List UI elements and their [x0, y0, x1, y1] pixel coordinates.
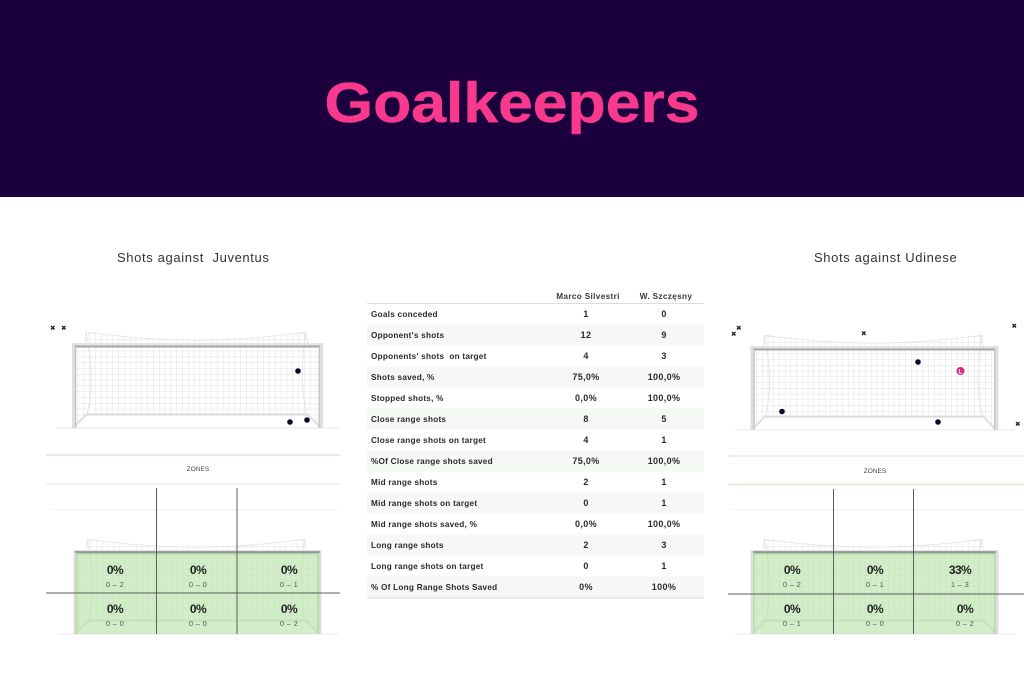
zone values right: 0 – 2 — [783, 580, 801, 589]
row: close range shots: Close range shots — [371, 415, 446, 424]
row: long range saved: 100% — [652, 582, 676, 592]
row: close range saved: 100,0% — [648, 456, 680, 466]
row stripes — [367, 324, 704, 598]
row: long range shots — [371, 540, 667, 550]
row: on target: 3 — [661, 351, 667, 361]
row: mid range saved: 0,0% — [575, 519, 597, 529]
zone values left: 0% — [107, 602, 124, 616]
zone values left: 0 – 0 — [189, 619, 207, 628]
row: goals conceded: 0 — [661, 309, 667, 319]
row: long range on target: Long range shots on target — [371, 562, 484, 571]
panel: Juventus goal shot map — [51, 326, 340, 428]
goal conceded marker — [956, 367, 964, 376]
row: opponent's shots — [371, 330, 667, 340]
zone values left: 0 – 2 — [106, 580, 124, 589]
row: opponent's shots: 12 — [581, 330, 591, 340]
panel: Udinese goal shot map — [732, 324, 1020, 430]
title: Goalkeepers — [324, 71, 700, 135]
row: goals conceded: 1 — [583, 309, 589, 319]
row: long range shots: Long range shots — [371, 541, 444, 550]
zone values left — [106, 563, 298, 628]
row: close range saved: %Of Close range shots saved — [371, 457, 493, 466]
row: goals conceded: Goals conceded — [371, 310, 438, 319]
zone values right: 0% — [867, 602, 884, 616]
row: shots saved: Shots saved, % — [371, 373, 435, 382]
row: close range on target — [371, 435, 667, 445]
table header: Marco Silvestri — [556, 292, 620, 301]
zone values right: 33% — [949, 563, 972, 577]
row: shots saved: 100,0% — [648, 372, 680, 382]
row: close range on target: 1 — [661, 435, 667, 445]
heading: shots against Juventus: Shots against Juventus — [117, 250, 270, 265]
row: long range shots: 3 — [661, 540, 667, 550]
zone values left: 0 – 1 — [280, 580, 298, 589]
row: on target — [371, 351, 667, 361]
row: mid range saved: Mid range shots saved, % — [371, 520, 478, 529]
goal frame left — [56, 332, 340, 428]
row: close range saved — [371, 456, 680, 466]
row: mid range on target: Mid range shots on target — [371, 499, 477, 508]
goal frame right — [735, 335, 1015, 430]
zone values right: 0 – 0 — [866, 619, 884, 628]
table header — [556, 292, 692, 301]
missed shots right — [732, 324, 1020, 426]
header banner — [0, 0, 1024, 197]
zone values right — [783, 563, 974, 628]
row: mid range shots: 2 — [583, 477, 589, 487]
row: close range shots — [371, 414, 667, 424]
zone values right: 0% — [957, 602, 974, 616]
zone values right: 0% — [784, 563, 801, 577]
panel: Juventus zones — [46, 455, 340, 634]
row: mid range shots: Mid range shots — [371, 478, 438, 487]
heading: shots against Udinese: Shots against Udinese — [814, 250, 957, 265]
row: mid range on target — [371, 498, 667, 508]
zones header left: ZONES — [187, 466, 210, 473]
row: close range shots: 8 — [583, 414, 589, 424]
row: opponent's shots: Opponent's shots — [371, 331, 444, 340]
row: mid range shots: 1 — [661, 477, 667, 487]
row: mid range saved: 100,0% — [648, 519, 680, 529]
zone values right: 0% — [867, 563, 884, 577]
zone values left: 0% — [190, 602, 207, 616]
row: opponent's shots: 9 — [661, 330, 667, 340]
shots on target left — [287, 368, 310, 425]
zone values left: 0% — [107, 563, 124, 577]
panel: Udinese zones — [728, 456, 1024, 634]
row: close range on target: Close range shots on target — [371, 436, 486, 445]
row: close range on target: 4 — [583, 435, 589, 445]
zone values right: 0 – 2 — [956, 619, 974, 628]
zone values right: 0 – 1 — [866, 580, 884, 589]
shots on target right — [779, 359, 941, 425]
row: shots saved — [371, 372, 680, 382]
row: long range on target — [371, 561, 667, 571]
row: close range saved: 75,0% — [572, 456, 600, 466]
row: mid range shots — [371, 477, 667, 487]
zone values right: 0 – 1 — [783, 619, 801, 628]
zone values left: 0% — [281, 563, 298, 577]
zone values right: 0% — [784, 602, 801, 616]
row: on target: Opponents' shots on target — [371, 352, 487, 361]
zone values right: 1 – 3 — [951, 580, 969, 589]
table header: W. Szczęsny — [640, 292, 692, 301]
zones header right: ZONES — [864, 468, 887, 475]
missed shots left — [51, 326, 66, 330]
row: stopped shots — [371, 393, 680, 403]
zones header right — [728, 456, 1024, 484]
goal conceded marker: L — [959, 370, 963, 376]
row: stopped shots: 100,0% — [648, 393, 680, 403]
zone values left: 0 – 0 — [106, 619, 124, 628]
goal with green zones left — [50, 510, 340, 634]
row: long range saved: 0% — [579, 582, 593, 592]
row: long range on target: 1 — [661, 561, 667, 571]
zone values left: 0 – 2 — [280, 619, 298, 628]
zone grid left — [46, 488, 340, 634]
row: long range saved: % Of Long Range Shots Saved — [371, 583, 497, 592]
panel: comparison table — [367, 292, 704, 598]
row: mid range on target: 1 — [661, 498, 667, 508]
goal with green zones right — [730, 510, 1024, 634]
row: mid range on target: 0 — [583, 498, 589, 508]
zone values left: 0 – 0 — [189, 580, 207, 589]
row: stopped shots: Stopped shots, % — [371, 394, 444, 403]
row: mid range saved — [371, 519, 680, 529]
zone values left: 0% — [190, 563, 207, 577]
row: on target: 4 — [583, 351, 589, 361]
zone values left: 0% — [281, 602, 298, 616]
row: goals conceded — [371, 309, 667, 319]
row: long range on target: 0 — [583, 561, 589, 571]
zone grid right — [728, 489, 1024, 634]
row: long range saved — [371, 582, 676, 592]
row: close range shots: 5 — [661, 414, 667, 424]
row: stopped shots: 0,0% — [575, 393, 597, 403]
row: shots saved: 75,0% — [572, 372, 600, 382]
row: long range shots: 2 — [583, 540, 589, 550]
